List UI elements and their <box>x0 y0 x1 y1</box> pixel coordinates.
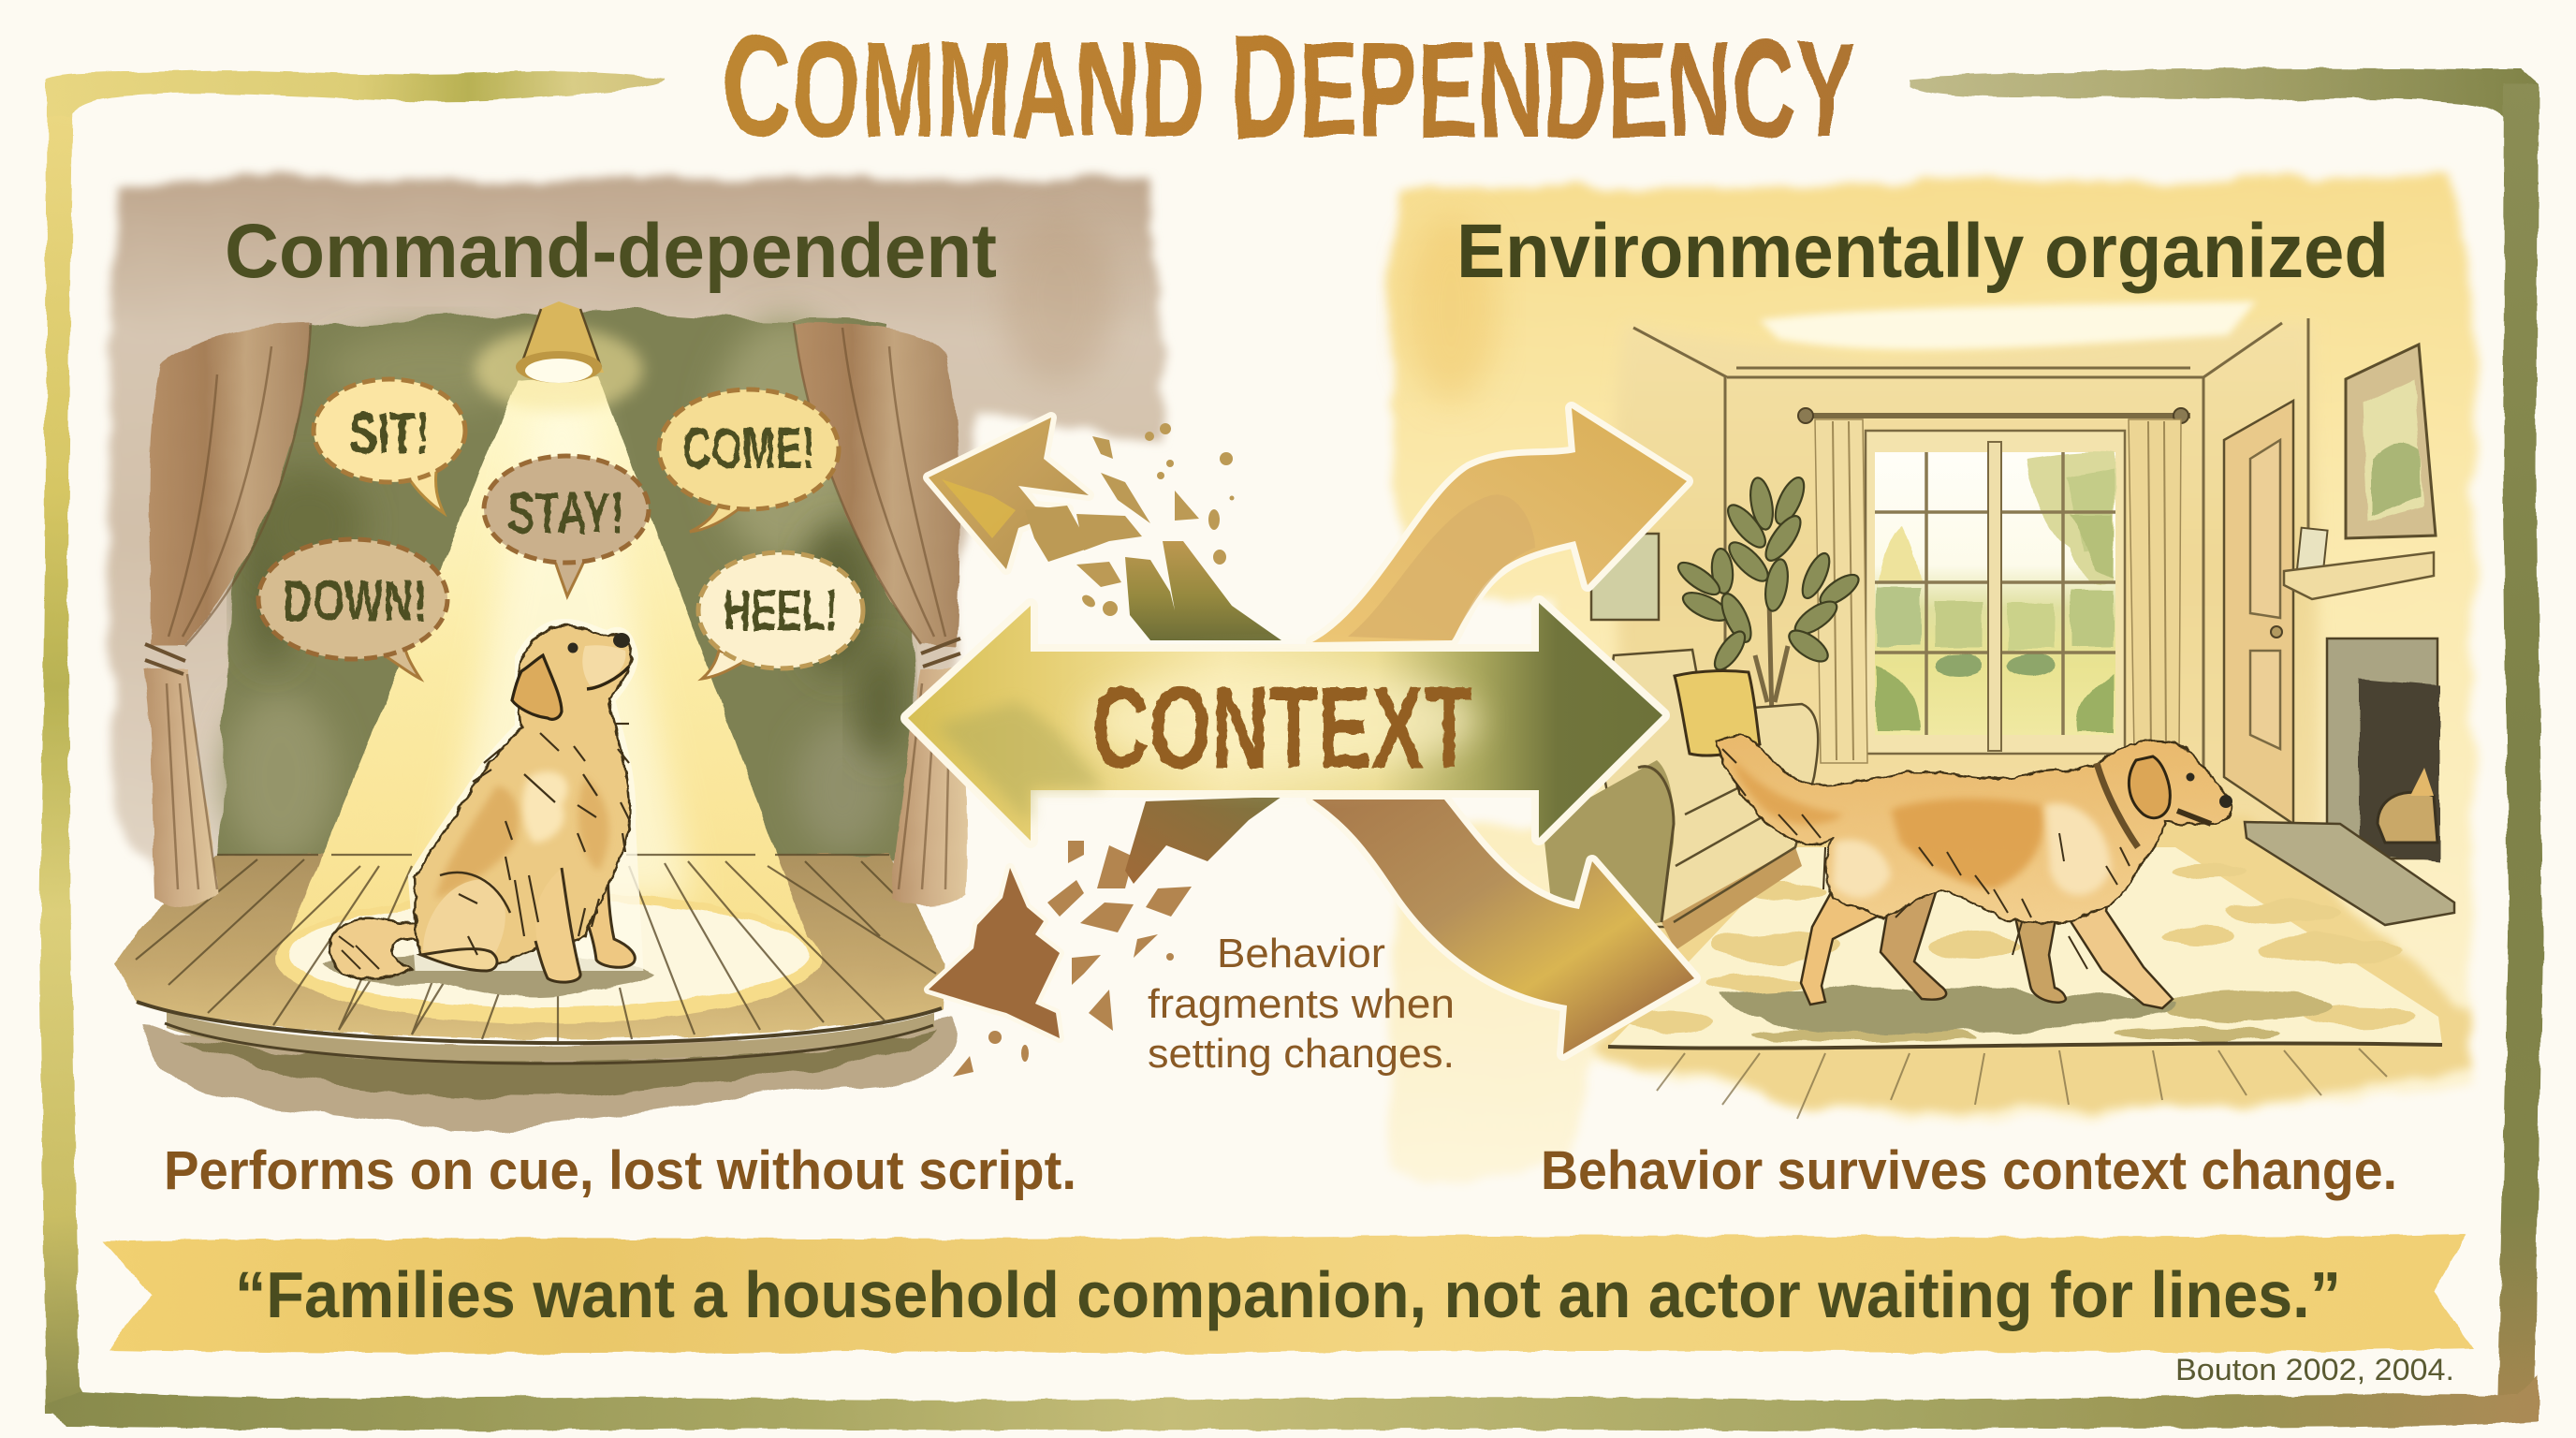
speech bubble: DOWN <box>258 539 447 679</box>
ear <box>2129 756 2170 818</box>
mouth <box>587 667 629 689</box>
back wall trim <box>1633 318 2308 796</box>
dog shadow <box>323 953 655 997</box>
floor planks <box>136 855 936 1041</box>
annotation: behavior fragments: Behavior <box>1217 931 1385 976</box>
walking golden retriever <box>1717 736 2232 1008</box>
panel: command-dependent stage <box>108 178 1160 1131</box>
caption: right: Behavior survives context change. <box>1541 1140 2397 1201</box>
heading: command-dependent: Command-dependent <box>225 209 997 294</box>
quote text: “Families want a household companion, not an actor waiting for lines.” <box>235 1258 2341 1331</box>
quote banner <box>103 1234 2473 1354</box>
cushion <box>1675 671 1760 756</box>
fur strokes <box>1722 749 2130 969</box>
speech bubble: HEEL <box>698 552 863 679</box>
frame top-right stroke <box>1910 68 2539 117</box>
tan wash shading <box>1002 215 1114 384</box>
annotation: behavior fragments: fragments when <box>1148 981 1455 1027</box>
fur shading <box>435 786 519 899</box>
rug front edge <box>1608 1043 2442 1049</box>
left curtain <box>144 323 311 906</box>
right curtain <box>794 323 967 906</box>
spotlight pool <box>275 892 822 1023</box>
arrow: lower right curved <box>1312 800 1694 1054</box>
speech bubble: DOWN: DOWN! <box>283 569 427 634</box>
saddle shading <box>1891 799 2043 889</box>
speech bubble: HEEL: HEEL! <box>724 579 838 643</box>
mantel <box>2284 528 2434 599</box>
armchair <box>1543 650 1818 950</box>
speech bubble: SIT: SIT! <box>349 402 430 466</box>
arrow olive wash <box>936 702 1105 824</box>
speech bubble: SIT <box>314 379 465 513</box>
far front leg <box>2014 903 2066 1003</box>
armchair wood band <box>1661 847 1802 950</box>
window curtains <box>1815 419 2181 763</box>
floor <box>1591 814 2471 1111</box>
mouth <box>2177 811 2211 824</box>
sitting golden retriever <box>329 625 637 982</box>
frame bottom edge <box>47 1376 2539 1431</box>
curtain tieback right <box>921 638 960 667</box>
window <box>1866 431 2125 754</box>
citation: Bouton 2002, 2004. <box>2175 1353 2454 1387</box>
door <box>2224 401 2293 824</box>
wall picture right <box>2346 345 2436 538</box>
near front leg <box>535 868 580 982</box>
context label: CONTEXT <box>1091 664 1473 793</box>
speech bubble: COME <box>659 389 839 532</box>
arrow: lower left shattered <box>929 797 1281 1077</box>
chest highlight <box>522 771 568 843</box>
fur strokes <box>459 724 630 955</box>
speech bubble: COME: COME! <box>682 417 815 481</box>
speech bubble: STAY <box>484 456 649 596</box>
eye <box>567 642 578 653</box>
heading: environmentally organized: Environmentally organized <box>1456 209 2389 294</box>
nose <box>613 633 630 648</box>
arrow: main double-headed context <box>908 603 1662 841</box>
tail shading <box>1732 758 1844 825</box>
collar <box>2097 763 2138 847</box>
annotation: behavior fragments <box>1148 931 1455 1077</box>
far rear leg <box>1881 889 1946 1000</box>
speech bubble: STAY: STAY! <box>507 481 624 546</box>
curtain tieback left <box>145 644 185 674</box>
muzzle highlight <box>582 645 625 685</box>
beam glow <box>440 393 693 899</box>
fireplace <box>2327 638 2439 861</box>
spotlight lamp <box>475 301 643 412</box>
arrow: upper left shattered <box>929 418 1281 640</box>
rear paw <box>421 949 497 971</box>
stage front edge <box>137 1002 942 1043</box>
panel: environmentally organized room <box>1385 174 2476 1186</box>
chest highlight <box>2045 803 2111 895</box>
rug <box>1608 847 2442 1047</box>
window trees <box>1877 452 2115 732</box>
dog halo <box>415 625 637 964</box>
wall shading <box>1614 323 2321 936</box>
stage shadow <box>145 1016 960 1131</box>
spotlight beam <box>281 376 814 955</box>
dog shadow on rug <box>1722 988 2176 1034</box>
body <box>415 625 632 964</box>
wash shading <box>1404 215 1498 403</box>
haunch <box>423 880 505 955</box>
frame right edge <box>2497 84 2542 1414</box>
frame top-left stroke <box>47 70 666 117</box>
curtain rod <box>1798 408 2190 423</box>
floor boards <box>1657 1049 2387 1119</box>
eye and nose <box>2187 773 2232 808</box>
potted plant <box>1674 474 1863 721</box>
hearth <box>2245 822 2454 925</box>
near front leg <box>2062 889 2173 1008</box>
stage backdrop <box>217 310 922 861</box>
stage apron <box>167 1011 934 1061</box>
small wall picture <box>1591 534 1659 620</box>
tail strokes <box>339 936 379 969</box>
arrow: upper right curved <box>1312 408 1687 642</box>
ear <box>512 655 562 719</box>
arrow centre glow <box>1086 667 1479 775</box>
far front leg <box>580 858 635 967</box>
tail <box>329 918 418 978</box>
yellow wash <box>1385 174 2476 1186</box>
near rear leg <box>1801 889 1884 1005</box>
caption: left: Performs on cue, lost without script. <box>164 1140 1076 1201</box>
rear highlight <box>1833 840 1891 898</box>
annotation: behavior fragments: setting changes. <box>1148 1031 1455 1077</box>
tan watercolor wash <box>108 178 1160 899</box>
title: COMMAND DEPENDENCY <box>723 6 1856 169</box>
body and tail <box>1717 736 2232 924</box>
ceiling highlight <box>1760 301 2256 349</box>
stage floor <box>114 855 945 1039</box>
frame left edge <box>39 94 94 1414</box>
armchair olive side <box>1543 760 1674 936</box>
